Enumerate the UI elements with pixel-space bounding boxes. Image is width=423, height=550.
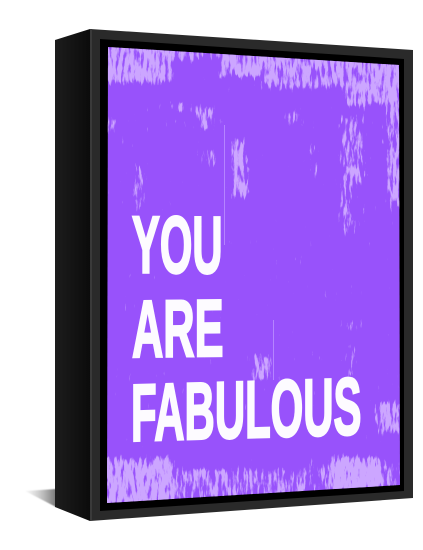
frame side face xyxy=(55,29,90,521)
cast shadow xyxy=(25,489,56,507)
distressed texture xyxy=(100,38,405,508)
canvas artwork xyxy=(100,38,405,510)
thin vertical scratches xyxy=(224,125,274,380)
headline: ARE: ARE xyxy=(132,284,224,375)
headline: YOU: YOU xyxy=(132,201,222,291)
purple background xyxy=(100,40,405,510)
frame front face xyxy=(90,29,413,521)
frame xyxy=(55,29,413,521)
